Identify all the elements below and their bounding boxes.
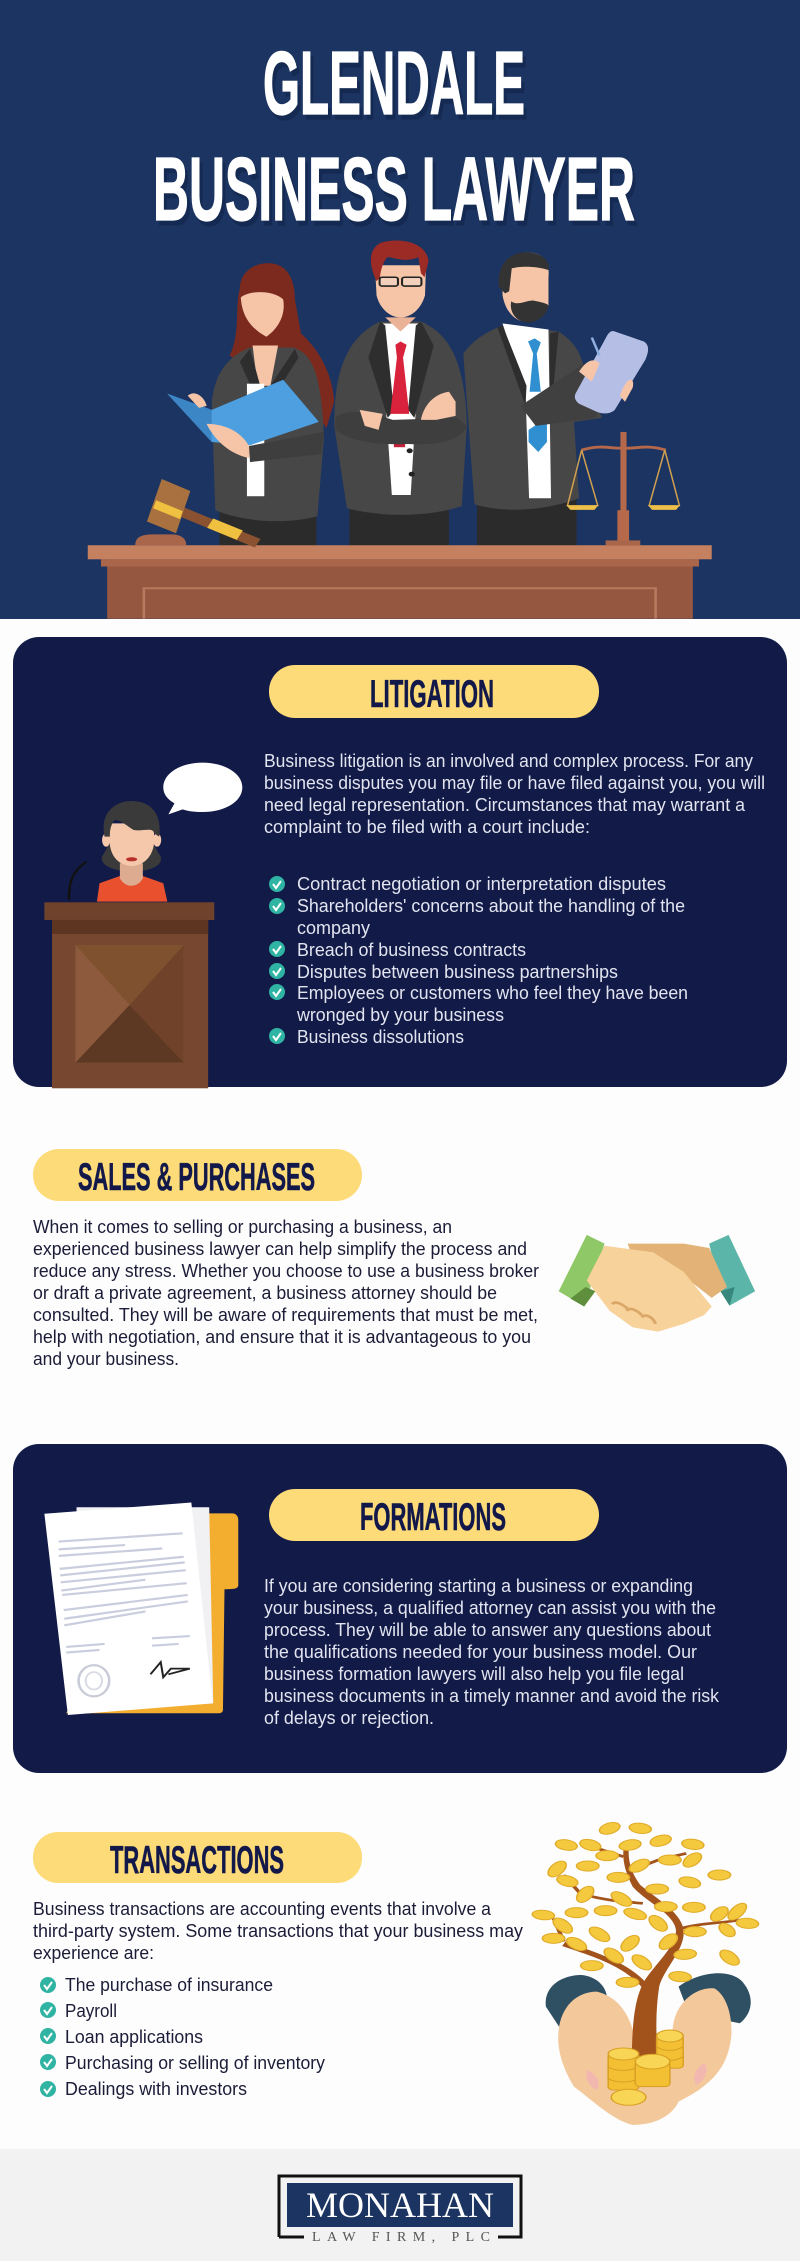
clipboard — [575, 331, 648, 413]
litigation intro text: business disputes you may file or have filed against you, you will — [264, 773, 765, 793]
microphone — [69, 862, 87, 900]
panel: litigation — [13, 637, 787, 1088]
heading pill: transactions — [33, 1832, 362, 1883]
sales text: and your business. — [33, 1349, 179, 1369]
sales text: reduce any stress. Whether you choose to use a business broker — [33, 1261, 539, 1281]
litigation bullet list: company — [297, 918, 370, 938]
heading pill: litigation: LITIGATION — [370, 673, 494, 716]
gavel — [135, 479, 258, 545]
section: transactions — [33, 1820, 760, 2125]
illustration: speaker at podium — [44, 763, 242, 1088]
open blue folder — [167, 380, 319, 445]
sales text: consulted. They will be aware of requirements that must be met, — [33, 1305, 538, 1325]
coin stacks — [608, 2030, 683, 2105]
sleeves — [546, 1975, 607, 2030]
logo: Monahan Law Firm: MONAHAN — [306, 2185, 494, 2225]
sales text — [33, 1217, 539, 1369]
litigation bullet list — [296, 874, 688, 1047]
icon: handshake — [559, 1235, 755, 1332]
heading pill: sales and purchases: SALES & PURCHASES — [78, 1156, 315, 1199]
litigation intro text: need legal representation. Circumstances that may warrant a — [264, 795, 746, 815]
heading pill: sales and purchases — [33, 1149, 362, 1201]
sales text: or draft a private agreement, a business attorney should be — [33, 1283, 497, 1303]
formations text: process. They will be able to answer any questions about — [264, 1620, 711, 1640]
litigation bullet list: Employees or customers who feel they have been — [297, 983, 688, 1003]
litigation bullet list: Shareholders' concerns about the handling of the — [297, 896, 685, 916]
formations text: of delays or rejection. — [264, 1708, 434, 1728]
check icons: litigation — [269, 876, 285, 1044]
footer band — [0, 2149, 800, 2261]
formations text: the qualifications needed for your business model. Our — [264, 1642, 697, 1662]
transactions bullet list: Dealings with investors — [65, 2079, 247, 2099]
sales text: When it comes to selling or purchasing a business, an — [33, 1217, 452, 1237]
transactions bullet list — [65, 1975, 325, 2099]
check icons: transactions — [40, 1977, 56, 2097]
speech bubble — [163, 763, 242, 814]
transactions intro text: Business transactions are accounting events that involve a — [33, 1899, 492, 1919]
icon: documents in folder — [44, 1503, 238, 1715]
formations text: If you are considering starting a business or expanding — [264, 1576, 693, 1596]
heading pill: formations — [269, 1489, 599, 1541]
transactions bullet list: The purchase of insurance — [65, 1975, 273, 1995]
transactions bullet list: Loan applications — [65, 2027, 203, 2047]
header panel — [0, 0, 800, 619]
transactions intro text — [33, 1899, 523, 1963]
illustration: money tree in hands — [531, 1820, 760, 2125]
sales text: help with negotiation, and ensure that it is advantageous to you — [33, 1327, 531, 1347]
woman lawyer — [167, 263, 334, 546]
speaker — [97, 801, 167, 902]
litigation intro text: complaint to be filed with a court include: — [264, 817, 590, 837]
title: GLENDALE — [263, 34, 525, 134]
logo: Monahan Law Firm: LAW FIRM, PLC — [312, 2230, 490, 2245]
formations text — [264, 1576, 720, 1728]
formations text: business formation lawyers will also help you file legal — [264, 1664, 684, 1684]
hands — [558, 1988, 731, 2125]
title — [153, 34, 635, 240]
sales text: experienced business lawyer can help simplify the process and — [33, 1239, 527, 1259]
trunk and branches — [623, 1850, 684, 2057]
litigation bullet list: Contract negotiation or interpretation disputes — [297, 874, 666, 894]
heading pill: litigation — [269, 665, 599, 718]
heading pill: transactions: TRANSACTIONS — [110, 1839, 284, 1882]
litigation bullet list: wronged by your business — [296, 1005, 504, 1025]
panel: formations — [13, 1444, 787, 1773]
litigation bullet list: Disputes between business partnerships — [297, 962, 618, 982]
scales of justice — [566, 432, 680, 546]
section: sales and purchases — [33, 1149, 755, 1369]
heading pill: formations: FORMATIONS — [360, 1496, 506, 1539]
transactions intro text: third-party system. Some transactions that your business may — [33, 1921, 523, 1941]
formations text: your business, a qualified attorney can assist you with the — [264, 1598, 716, 1618]
podium — [44, 902, 214, 1088]
litigation bullet list: Breach of business contracts — [297, 940, 526, 960]
bearded lawyer with clipboard — [463, 252, 648, 546]
illustration: three lawyers at a courtroom desk — [88, 241, 712, 619]
courtroom desk — [88, 545, 712, 619]
transactions intro text: experience are: — [33, 1943, 154, 1963]
litigation bullet list: Business dissolutions — [297, 1027, 464, 1047]
gold coins on the tree — [531, 1820, 760, 1987]
logo: Monahan Law Firm — [279, 2176, 521, 2245]
man with red tie — [334, 241, 467, 546]
formations text: business documents in a timely manner and avoid the risk — [264, 1686, 720, 1706]
transactions bullet list: Purchasing or selling of inventory — [65, 2053, 325, 2073]
litigation intro text — [264, 751, 765, 837]
litigation intro text: Business litigation is an involved and complex process. For any — [264, 751, 753, 771]
transactions bullet list: Payroll — [65, 2001, 117, 2021]
